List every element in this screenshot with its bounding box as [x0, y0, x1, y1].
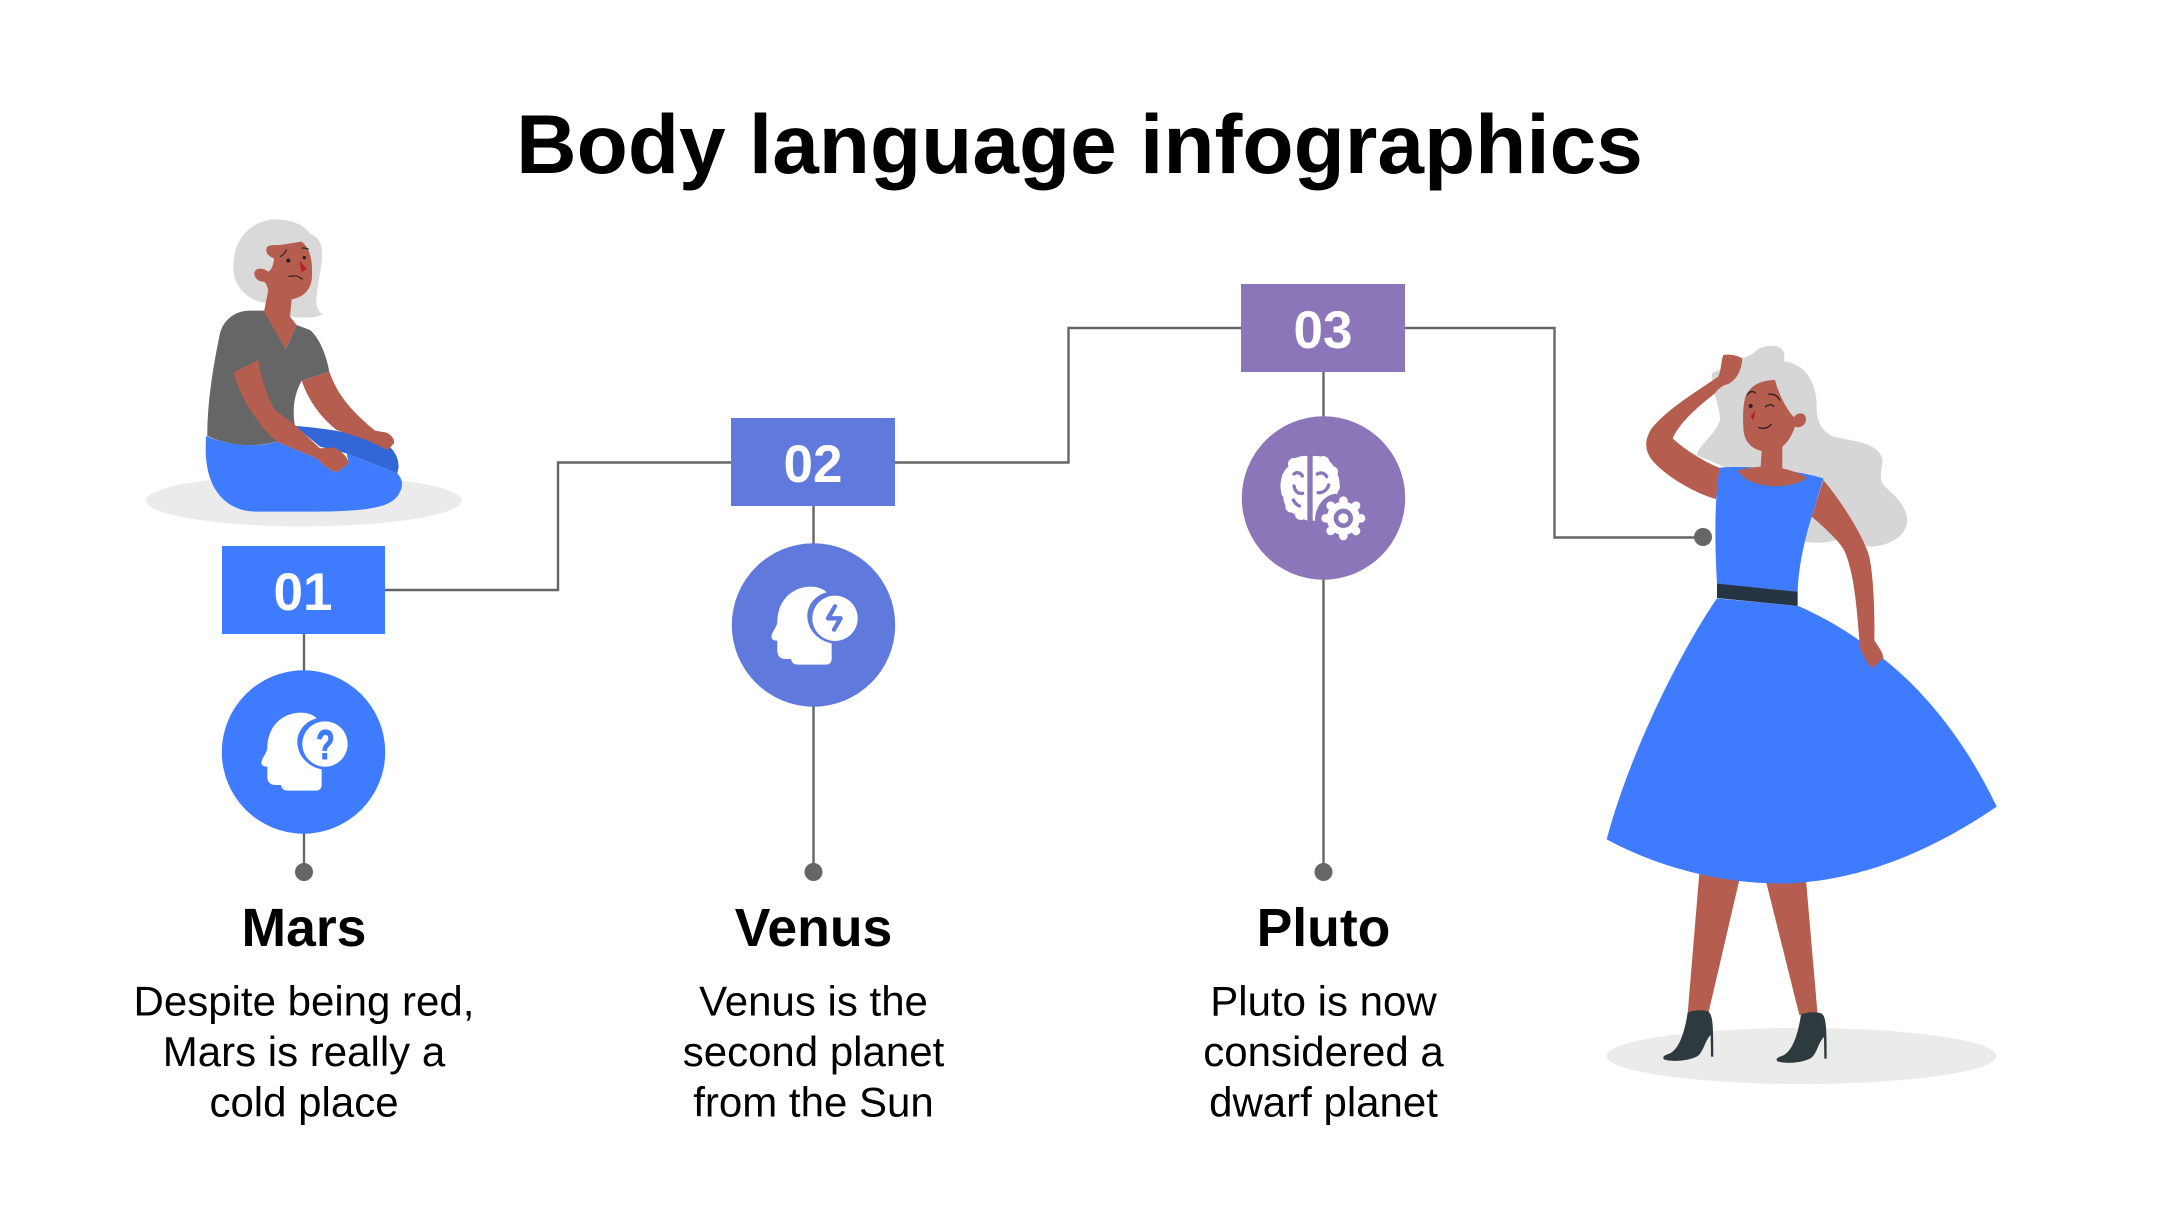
step 01 number box [222, 546, 385, 634]
text block: Venus: Venus [735, 899, 892, 958]
text block: Venus: from the Sun [693, 1078, 934, 1126]
step 02 number box: 02 [784, 435, 842, 494]
text block: Mars: Mars is really a [163, 1028, 446, 1075]
step 02 number box [731, 418, 895, 506]
step 01 circle icon: head with question mark [222, 670, 385, 834]
text block: Mars: Mars [242, 899, 366, 958]
illustration: seated worried woman [146, 219, 462, 526]
step 03 number box: 03 [1294, 301, 1352, 360]
text block: Mars: Despite being red, [134, 978, 474, 1024]
text block: Pluto: Pluto is now [1210, 978, 1437, 1024]
text block: Pluto: considered a [1203, 1028, 1444, 1075]
step 01 number box: 01 [274, 563, 332, 622]
text block: Pluto [1203, 899, 1444, 1126]
text block: Pluto: Pluto [1257, 899, 1390, 958]
connector end dots [295, 528, 1712, 881]
step 01 circle icon: head with question mark: ? [316, 721, 335, 768]
text block: Mars: cold place [209, 1078, 399, 1126]
text block: Venus: second planet [683, 1028, 945, 1075]
text block: Venus: Venus is the [699, 978, 928, 1024]
text block: Mars [134, 899, 474, 1126]
text block: Pluto: dwarf planet [1209, 1078, 1438, 1126]
illustration: standing woman in blue dress [1607, 346, 1997, 1084]
step 02 circle icon: head with lightning bolt [732, 543, 895, 707]
step 03 circle icon: brain with gear [1242, 416, 1405, 580]
title: Body language infographics [516, 97, 1643, 191]
connector lines [304, 328, 1703, 872]
step 03 number box [1241, 284, 1405, 372]
text block: Venus [683, 899, 945, 1126]
